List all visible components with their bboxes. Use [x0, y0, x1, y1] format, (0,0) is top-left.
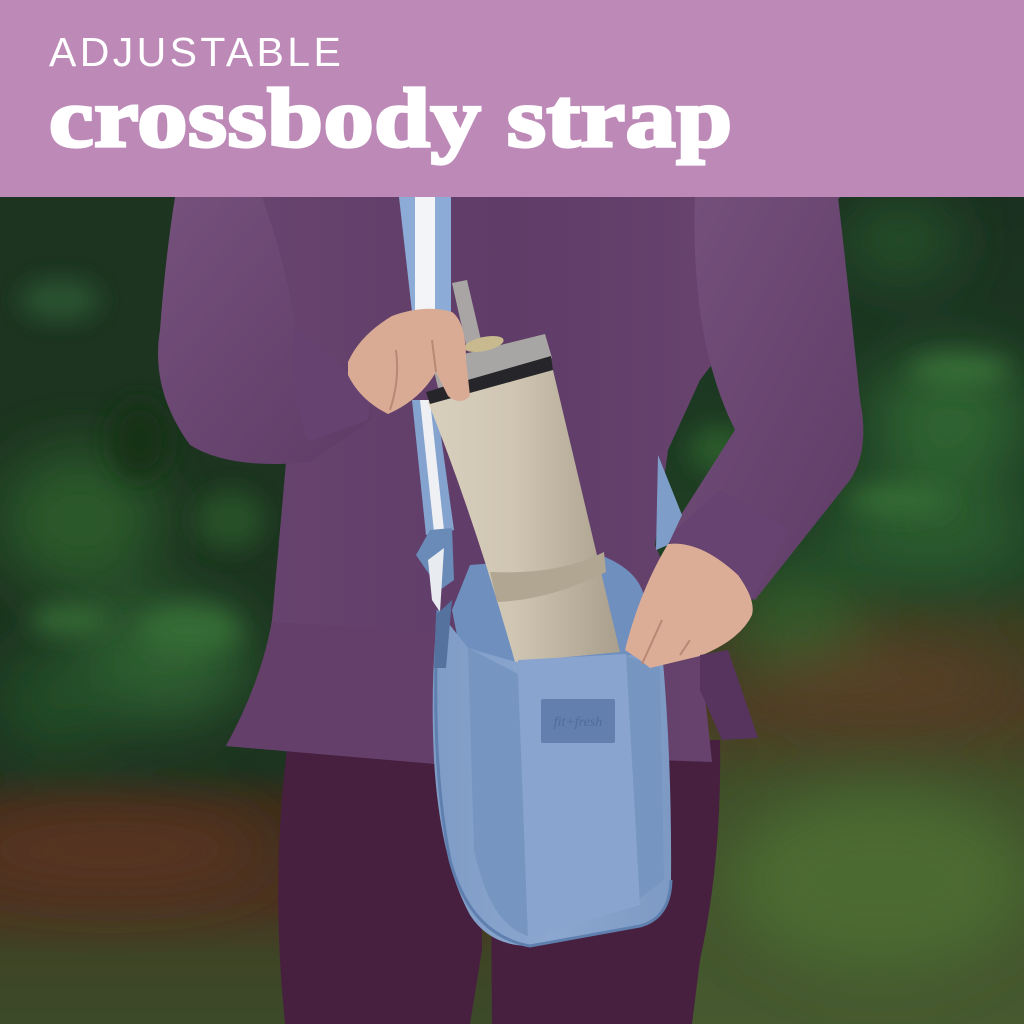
right arm sleeve — [665, 197, 863, 600]
title banner — [0, 0, 1024, 197]
lower hand in bag — [625, 544, 753, 668]
sweater body — [175, 197, 840, 764]
eyebrow heading: ADJUSTABLE — [49, 29, 344, 75]
bag back and opening — [452, 555, 645, 665]
bag brand patch — [541, 699, 615, 743]
leggings — [278, 740, 720, 1024]
tumbler — [426, 333, 620, 662]
crossbody strap — [399, 197, 682, 612]
sweater hem flap behind bag — [700, 650, 758, 740]
upper hand gripping tumbler — [348, 309, 470, 414]
bag body — [433, 600, 671, 946]
left arm sleeve — [158, 197, 372, 464]
tumbler straw — [452, 280, 481, 345]
bag brand patch: fit+fresh — [554, 715, 602, 730]
main heading: crossbody strap — [49, 72, 733, 165]
